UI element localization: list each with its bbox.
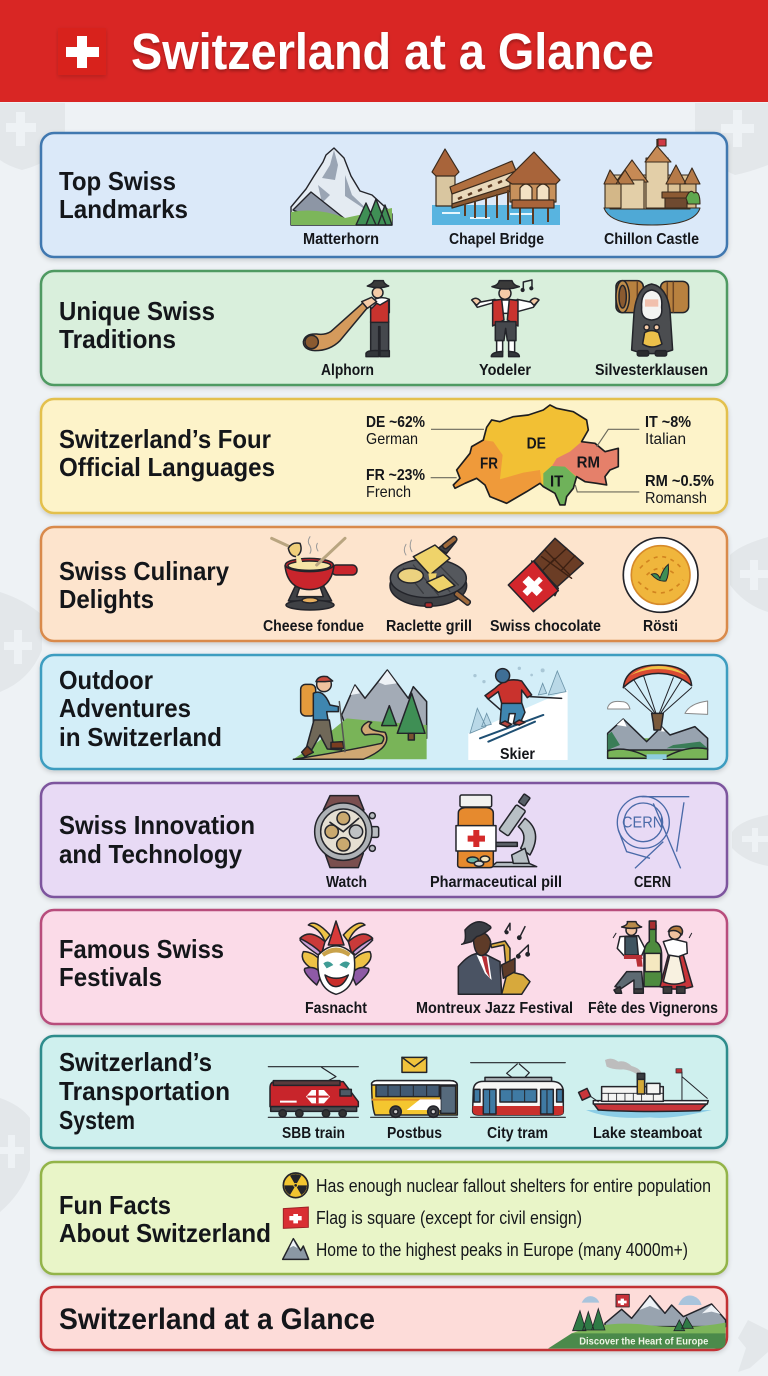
- map: language regions of Switzerland: FR: [480, 455, 498, 472]
- label: Yodeler: Yodeler: [479, 362, 531, 379]
- legend: DE: DE ~62%: [366, 414, 425, 431]
- label: Watch: Watch: [326, 874, 367, 891]
- icon: Swiss flag: [58, 28, 106, 75]
- label: Postbus: Postbus: [387, 1125, 442, 1142]
- map: language regions of Switzerland: IT: [550, 474, 564, 491]
- icon: paraglider: [608, 665, 708, 759]
- icon: Rösti: [623, 538, 698, 612]
- icon: CERN logo: CERN: [622, 815, 663, 832]
- icon: radiation symbol: [283, 1173, 308, 1198]
- icon: Chillon Castle: [604, 139, 700, 225]
- heading: innovation: Swiss Innovation: [59, 810, 255, 840]
- label: Chapel Bridge: Chapel Bridge: [449, 231, 544, 248]
- footer illustration: [548, 1294, 726, 1349]
- map: language regions of Switzerland: [431, 405, 639, 505]
- label: Fasnacht: Fasnacht: [305, 1000, 368, 1017]
- label: Lake steamboat: Lake steamboat: [593, 1125, 703, 1142]
- heading: fun facts: About Switzerland: [59, 1218, 271, 1248]
- icon: Yodeler: [472, 280, 539, 357]
- heading: transportation: Switzerland’s: [59, 1047, 212, 1077]
- label: Fête des Vignerons: Fête des Vignerons: [588, 1000, 718, 1017]
- map: language regions of Switzerland: RM: [577, 455, 600, 472]
- legend text: Italian: Italian: [645, 431, 686, 448]
- label: City tram: City tram: [487, 1125, 548, 1142]
- heading: traditions: Unique Swiss: [59, 296, 215, 326]
- icon: hiker in mountains: [293, 670, 427, 759]
- heading: fun facts: Fun Facts: [59, 1190, 171, 1220]
- fact: nuclear shelters: Has enough nuclear fallout shelters for entire population: [316, 1176, 711, 1196]
- label: Rösti: Rösti: [643, 618, 678, 635]
- panel: transportation: [41, 1036, 727, 1148]
- panel: footer: [41, 1287, 727, 1350]
- icon: Alphorn player: [303, 281, 389, 357]
- heading: outdoor: Outdoor: [59, 665, 153, 695]
- label: Cheese fondue: Cheese fondue: [263, 618, 364, 635]
- title: Switzerland at a Glance: [131, 23, 654, 80]
- legend text: French: French: [366, 484, 411, 501]
- icon: skier: [468, 667, 568, 763]
- icon: cheese fondue: [272, 537, 357, 610]
- icon: Swiss chocolate: [508, 538, 583, 612]
- legend text: Romansh: Romansh: [645, 490, 707, 507]
- label: Skier: Skier: [500, 746, 535, 763]
- panel: traditions: [41, 271, 727, 385]
- heading: festivals: Famous Swiss: [59, 934, 224, 964]
- panel: languages: [41, 399, 727, 513]
- panel: fun facts: [41, 1162, 727, 1274]
- icon: Postbus: [371, 1057, 457, 1117]
- panel: culinary: [41, 527, 727, 641]
- panel: outdoor: [41, 655, 727, 769]
- label: Raclette grill: Raclette grill: [386, 618, 472, 635]
- label: Matterhorn: Matterhorn: [303, 231, 379, 248]
- heading: transportation: Transportation: [59, 1076, 230, 1106]
- icon: jazz saxophonist: [458, 922, 530, 994]
- footer illustration: Discover the Heart of Europe: [579, 1336, 709, 1347]
- label: Chillon Castle: Chillon Castle: [604, 231, 699, 248]
- heading: languages: Switzerland’s Four: [59, 424, 271, 454]
- heading: traditions: Traditions: [59, 324, 176, 354]
- panel: landmarks: [41, 133, 727, 257]
- icon: watch: [315, 796, 379, 868]
- icon: Silvesterklausen: [616, 281, 689, 356]
- icon: flag: [283, 1207, 308, 1228]
- icon: CERN logo: [617, 796, 689, 868]
- heading: festivals: Festivals: [59, 962, 162, 992]
- label: SBB train: SBB train: [282, 1125, 345, 1142]
- header banner: [0, 0, 768, 102]
- fact: flag: Flag is square (except for civil ensign): [316, 1208, 582, 1228]
- label: Swiss chocolate: Swiss chocolate: [490, 618, 601, 635]
- heading: outdoor: in Switzerland: [59, 722, 222, 752]
- panel: innovation: [41, 783, 727, 897]
- label: Pharmaceutical pill: Pharmaceutical pill: [430, 874, 562, 891]
- legend: RM: RM ~0.5%: [645, 473, 714, 490]
- heading: outdoor: Adventures: [59, 693, 191, 723]
- icon: mountain: [283, 1239, 309, 1259]
- fact: peaks: Home to the highest peaks in Europe (many 4000m+): [316, 1240, 688, 1260]
- footer title: Switzerland at a Glance: [59, 1303, 375, 1336]
- map: language regions of Switzerland: DE: [527, 436, 546, 453]
- legend text: German: German: [366, 431, 418, 448]
- icon: Lake steamboat: [579, 1059, 712, 1118]
- heading: landmarks: Top Swiss: [59, 166, 176, 196]
- icon: Chapel Bridge: [432, 149, 560, 225]
- label: Silvesterklausen: Silvesterklausen: [595, 362, 708, 379]
- icon: Fête des Vignerons: [613, 921, 693, 993]
- icon: SBB train: [268, 1067, 358, 1117]
- heading: culinary: Swiss Culinary: [59, 556, 229, 586]
- heading: culinary: Delights: [59, 584, 154, 614]
- heading: innovation: and Technology: [59, 839, 242, 869]
- icon: City tram: [471, 1063, 565, 1117]
- heading: transportation: System: [59, 1105, 135, 1135]
- label: Alphorn: Alphorn: [321, 362, 374, 379]
- icon: raclette grill: [390, 536, 471, 607]
- icon: pill bottle and microscope: [456, 794, 537, 868]
- icon: Matterhorn: [291, 148, 392, 225]
- label: Montreux Jazz Festival: Montreux Jazz Festival: [416, 1000, 573, 1017]
- panel: festivals: [41, 910, 727, 1024]
- legend: FR: FR ~23%: [366, 467, 425, 484]
- heading: languages: Official Languages: [59, 452, 275, 482]
- heading: landmarks: Landmarks: [59, 194, 188, 224]
- label: CERN: CERN: [634, 874, 671, 891]
- legend: IT: IT ~8%: [645, 414, 691, 431]
- icon: Fasnacht mask: [300, 921, 373, 994]
